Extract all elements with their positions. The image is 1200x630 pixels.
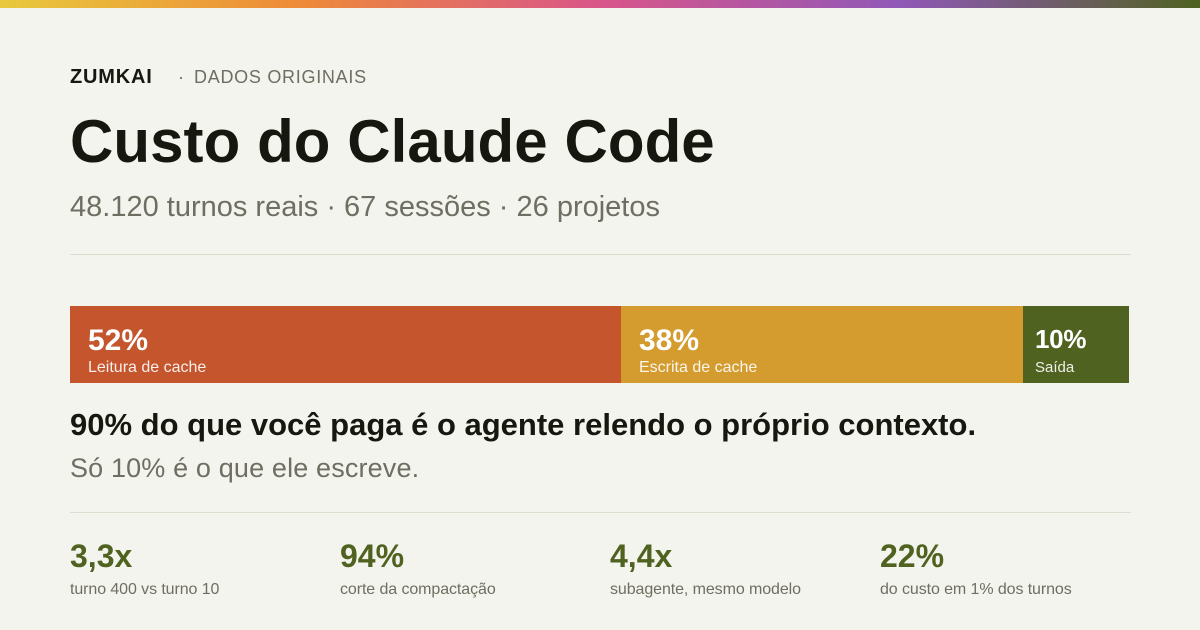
segment: output 10%: Saída xyxy=(1035,359,1074,376)
segment: cache read 52% xyxy=(70,306,621,383)
brand line xyxy=(70,66,367,88)
stat: compaction cut xyxy=(340,538,496,598)
tag: DADOS ORIGINAIS xyxy=(194,67,367,87)
stat: turn 400 vs turn 10 xyxy=(70,538,219,598)
stat: compaction cut: 94% xyxy=(340,538,404,574)
top gradient bar xyxy=(0,0,1200,8)
stat: cost in 1% of turns: do custo em 1% dos turnos xyxy=(880,581,1072,598)
stat: subagent same model: 4,4x xyxy=(610,538,672,574)
headline takeaway: 90% do que você paga é o agente relendo o próprio contexto. xyxy=(70,407,976,442)
stat: cost in 1% of turns: 22% xyxy=(880,538,944,574)
segment: output 10%: 10% xyxy=(1035,324,1086,354)
stat: cost in 1% of turns xyxy=(880,538,1072,598)
stat: turn 400 vs turn 10: 3,3x xyxy=(70,538,132,574)
stat: turn 400 vs turn 10: turno 400 vs turno 10 xyxy=(70,581,219,598)
brand name: ZUMKAI xyxy=(70,66,153,88)
subtitle: 48.120 turnos reais · 67 sessões · 26 projetos xyxy=(70,191,660,223)
segment: cache read 52%: Leitura de cache xyxy=(88,359,206,376)
stat: compaction cut: corte da compactação xyxy=(340,581,496,598)
segment: cache write 38% xyxy=(621,306,1023,383)
stat: subagent same model: subagente, mesmo modelo xyxy=(610,581,801,598)
segment: cache write 38%: 38% xyxy=(639,324,699,357)
segment: cache write 38%: Escrita de cache xyxy=(639,359,757,376)
segment: cache read 52%: 52% xyxy=(88,324,148,357)
secondary takeaway: Só 10% é o que ele escreve. xyxy=(70,453,419,483)
stacked bar chart: cost split xyxy=(70,306,1129,383)
segment: output 10% xyxy=(1023,306,1129,383)
stat: subagent same model xyxy=(610,538,801,598)
title: Custo do Claude Code xyxy=(70,108,715,175)
separator dot: · xyxy=(178,67,184,87)
